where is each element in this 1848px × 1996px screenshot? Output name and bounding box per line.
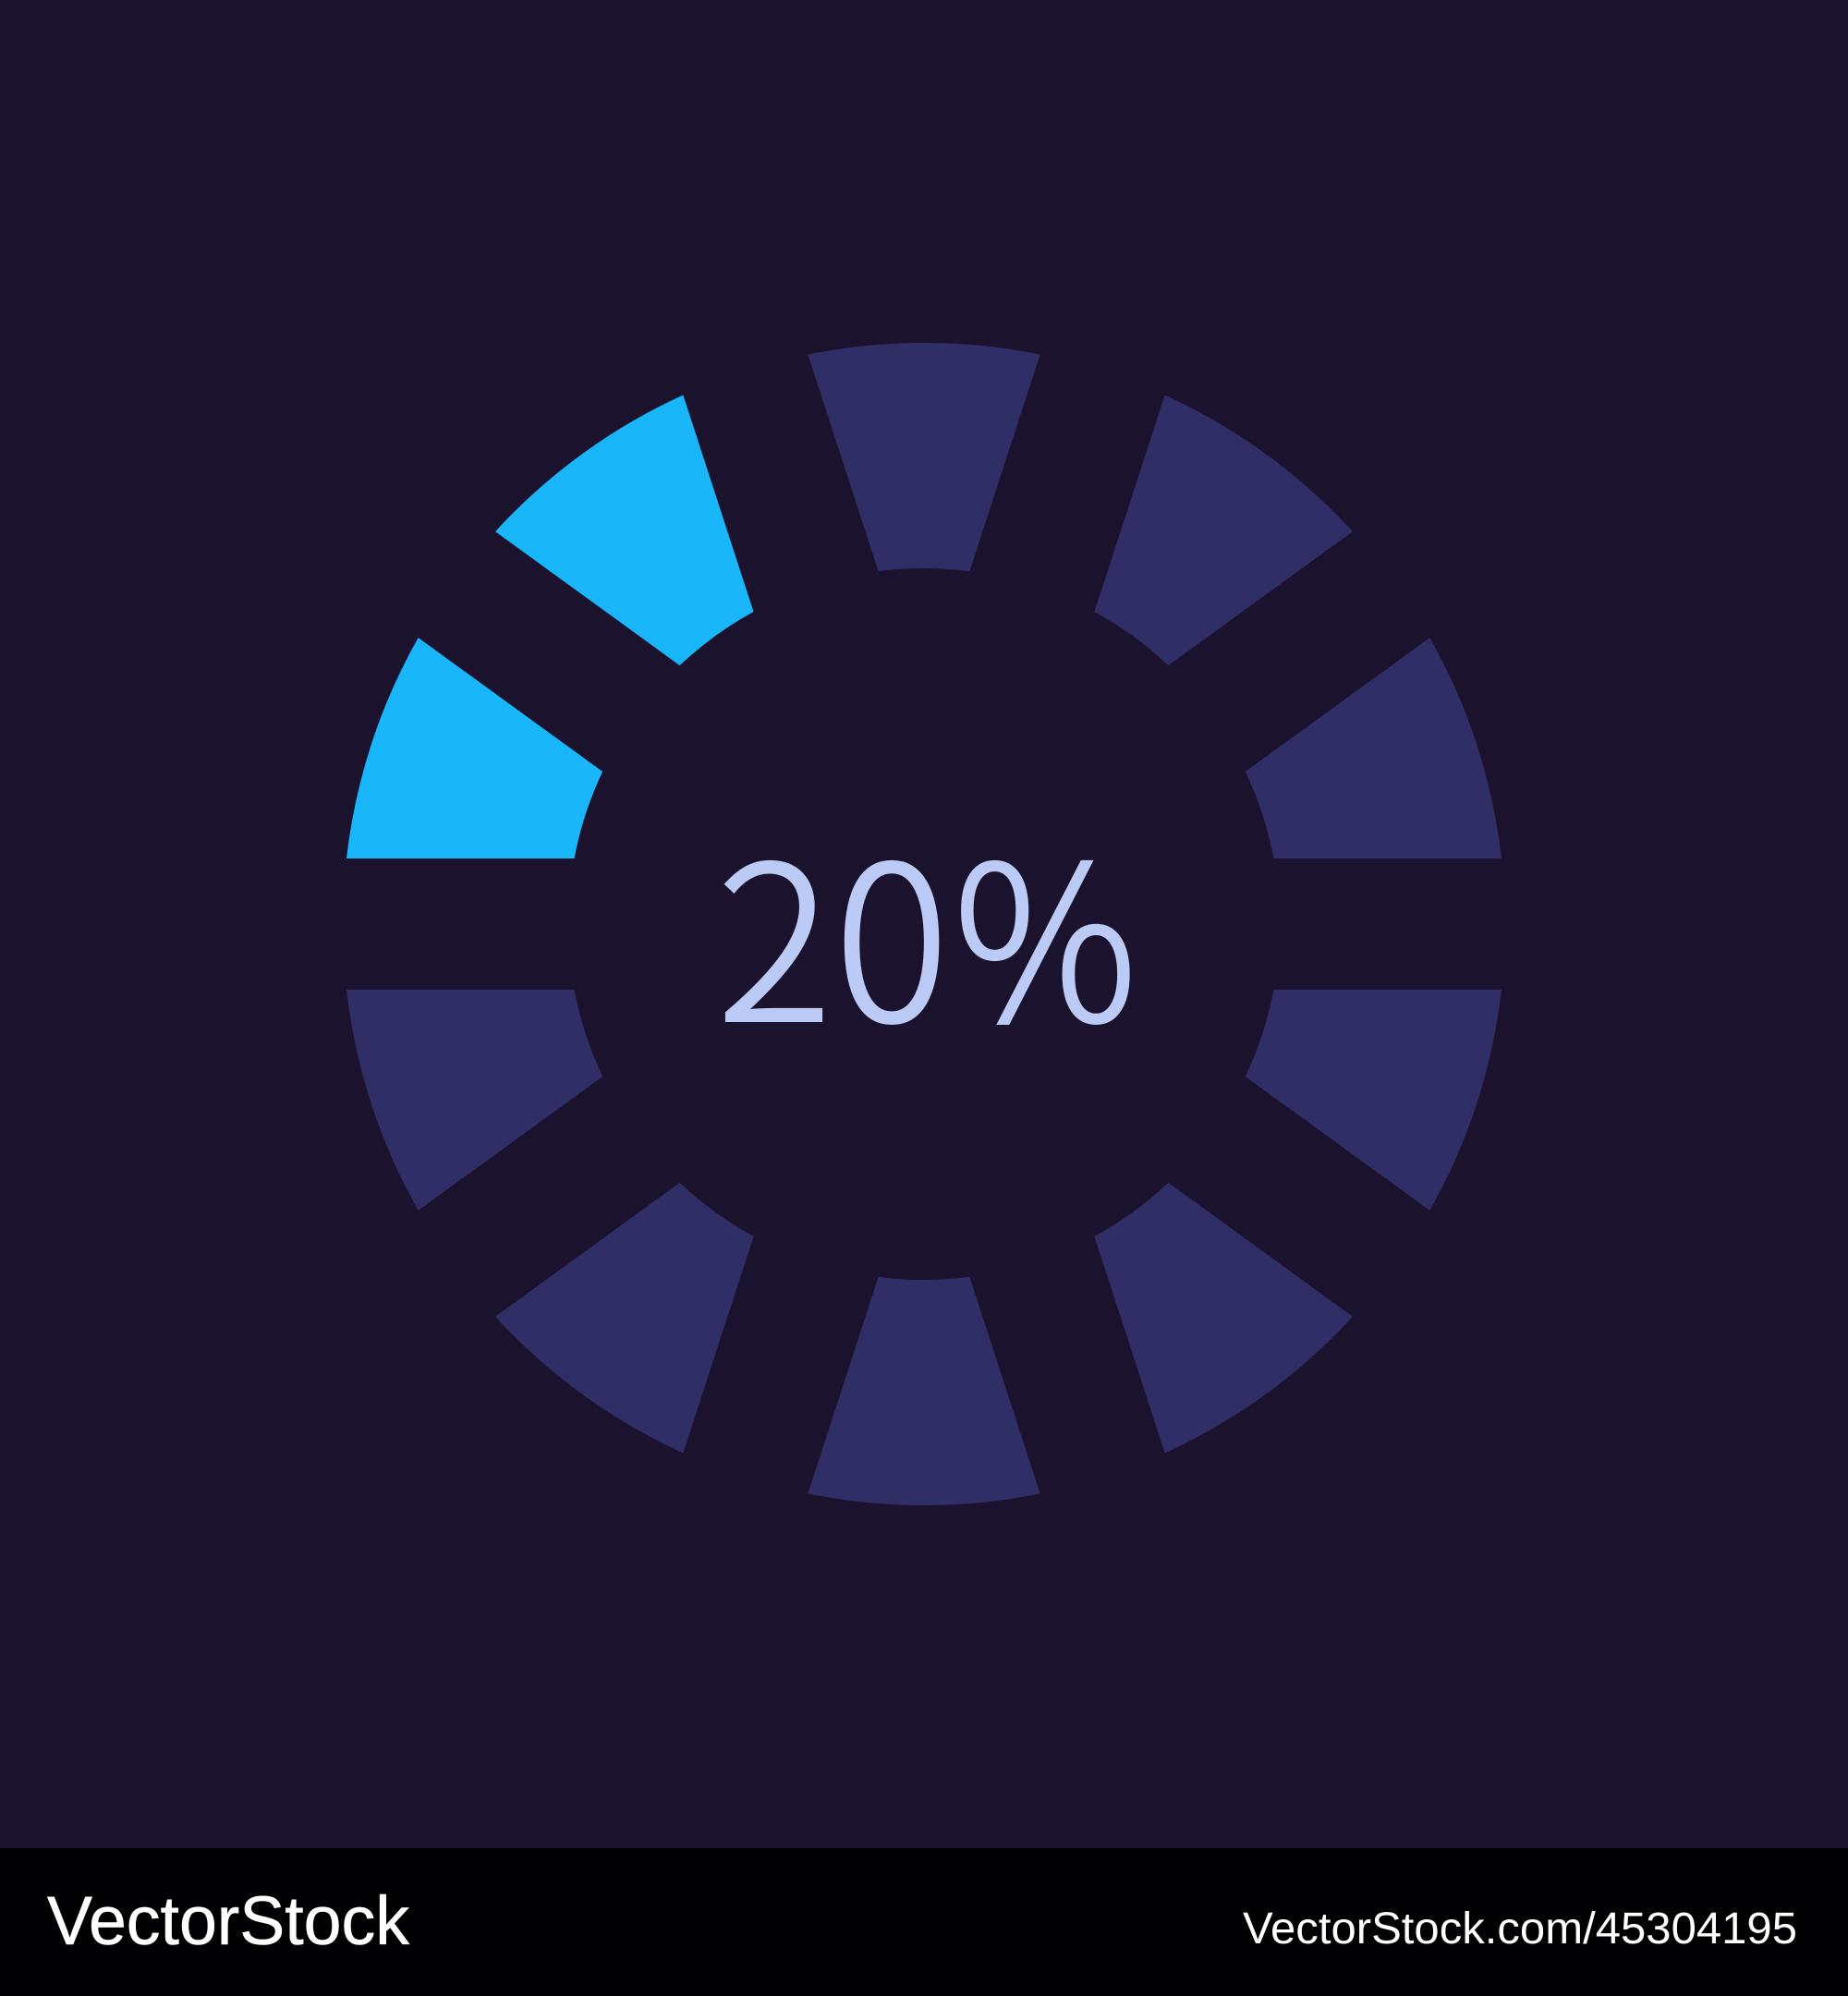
segment: empty left lower bbox=[346, 990, 602, 1211]
segment: empty top bbox=[808, 343, 1040, 571]
segment: empty right lower bbox=[1246, 990, 1502, 1211]
footer bar bbox=[0, 1848, 1848, 1996]
footer logo wordmark: VectorStock bbox=[47, 1882, 410, 1959]
segment: empty lower right bbox=[1094, 1183, 1353, 1453]
percentage value: 20 bbox=[717, 773, 949, 1083]
segment: filled 1 of 2 (left upper) bbox=[346, 638, 602, 858]
segment: empty upper right bbox=[1094, 396, 1353, 665]
percentage value: % bbox=[954, 773, 1137, 1083]
segment: empty lower left bbox=[495, 1183, 754, 1453]
percentage value bbox=[717, 773, 1137, 1083]
segment: filled 2 of 2 (upper left) bbox=[495, 396, 754, 665]
segment: empty bottom bbox=[808, 1277, 1040, 1505]
radial progress chart bbox=[346, 343, 1502, 1505]
segment: empty right upper bbox=[1246, 638, 1502, 858]
footer image URL text: VectorStock.com/45304195 bbox=[1243, 1905, 1797, 1953]
